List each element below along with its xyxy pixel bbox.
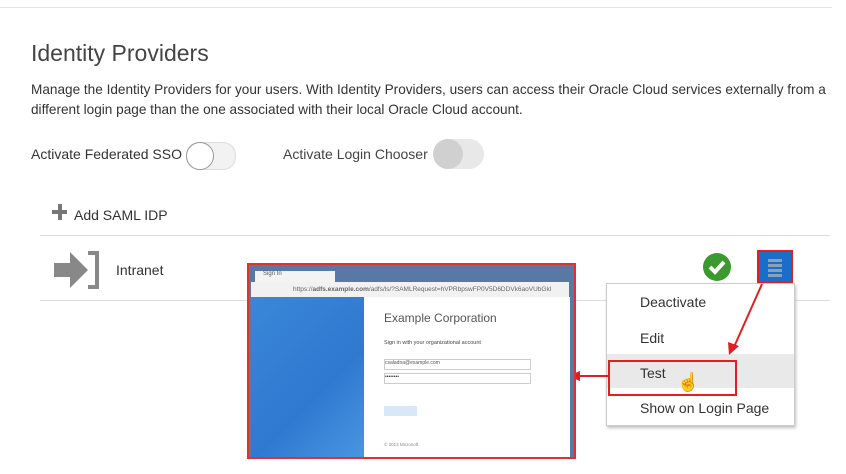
toggle: federated SSO: Activate Federated SSO	[31, 146, 182, 162]
add SAML IDP: Add SAML IDP	[74, 207, 168, 223]
screenshot: sign-in page	[247, 263, 576, 459]
add SAML IDP	[52, 204, 168, 223]
dropdown menu	[606, 283, 795, 426]
screenshot: sign-in page: csaladna@example.com	[385, 360, 440, 366]
label: Intranet: Intranet	[116, 262, 163, 278]
description: different login page than the one associated with their local Oracle Cloud account.	[31, 102, 523, 116]
highlight: Test	[608, 360, 737, 396]
dropdown menu: Show on Login Page	[640, 400, 769, 416]
cursor: ☝	[677, 372, 699, 392]
description: Manage the Identity Providers for your users. With Identity Providers, users can access their Oracle Cloud services externally from a	[31, 82, 826, 97]
screenshot: sign-in page: © 2013 Microsoft	[384, 442, 418, 447]
screenshot: sign-in page: Sign In	[263, 271, 282, 277]
dropdown menu: Edit	[640, 330, 664, 346]
title: Identity Providers	[31, 40, 209, 66]
description	[31, 82, 826, 117]
dropdown menu: Test	[640, 365, 666, 381]
toggle: federated SSO	[31, 142, 236, 170]
icon: sign-in arrow	[54, 251, 99, 289]
screenshot: sign-in page: Sign in with your organizational account	[384, 340, 481, 346]
toggle: login chooser: Activate Login Chooser	[283, 146, 428, 162]
screenshot: sign-in page: Example Corporation	[384, 311, 497, 325]
screenshot: sign-in page: https://adfs.example.com/adfs/ls/?SAMLRequest=hVPRbpswFP0V5D6DDVk6aoVUbGkl	[293, 286, 551, 293]
menu button	[757, 250, 793, 284]
screenshot: sign-in page: ••••••••	[385, 374, 399, 380]
toggle: login chooser	[283, 139, 484, 169]
icon: check	[703, 253, 731, 281]
dropdown menu: Deactivate	[640, 294, 706, 310]
